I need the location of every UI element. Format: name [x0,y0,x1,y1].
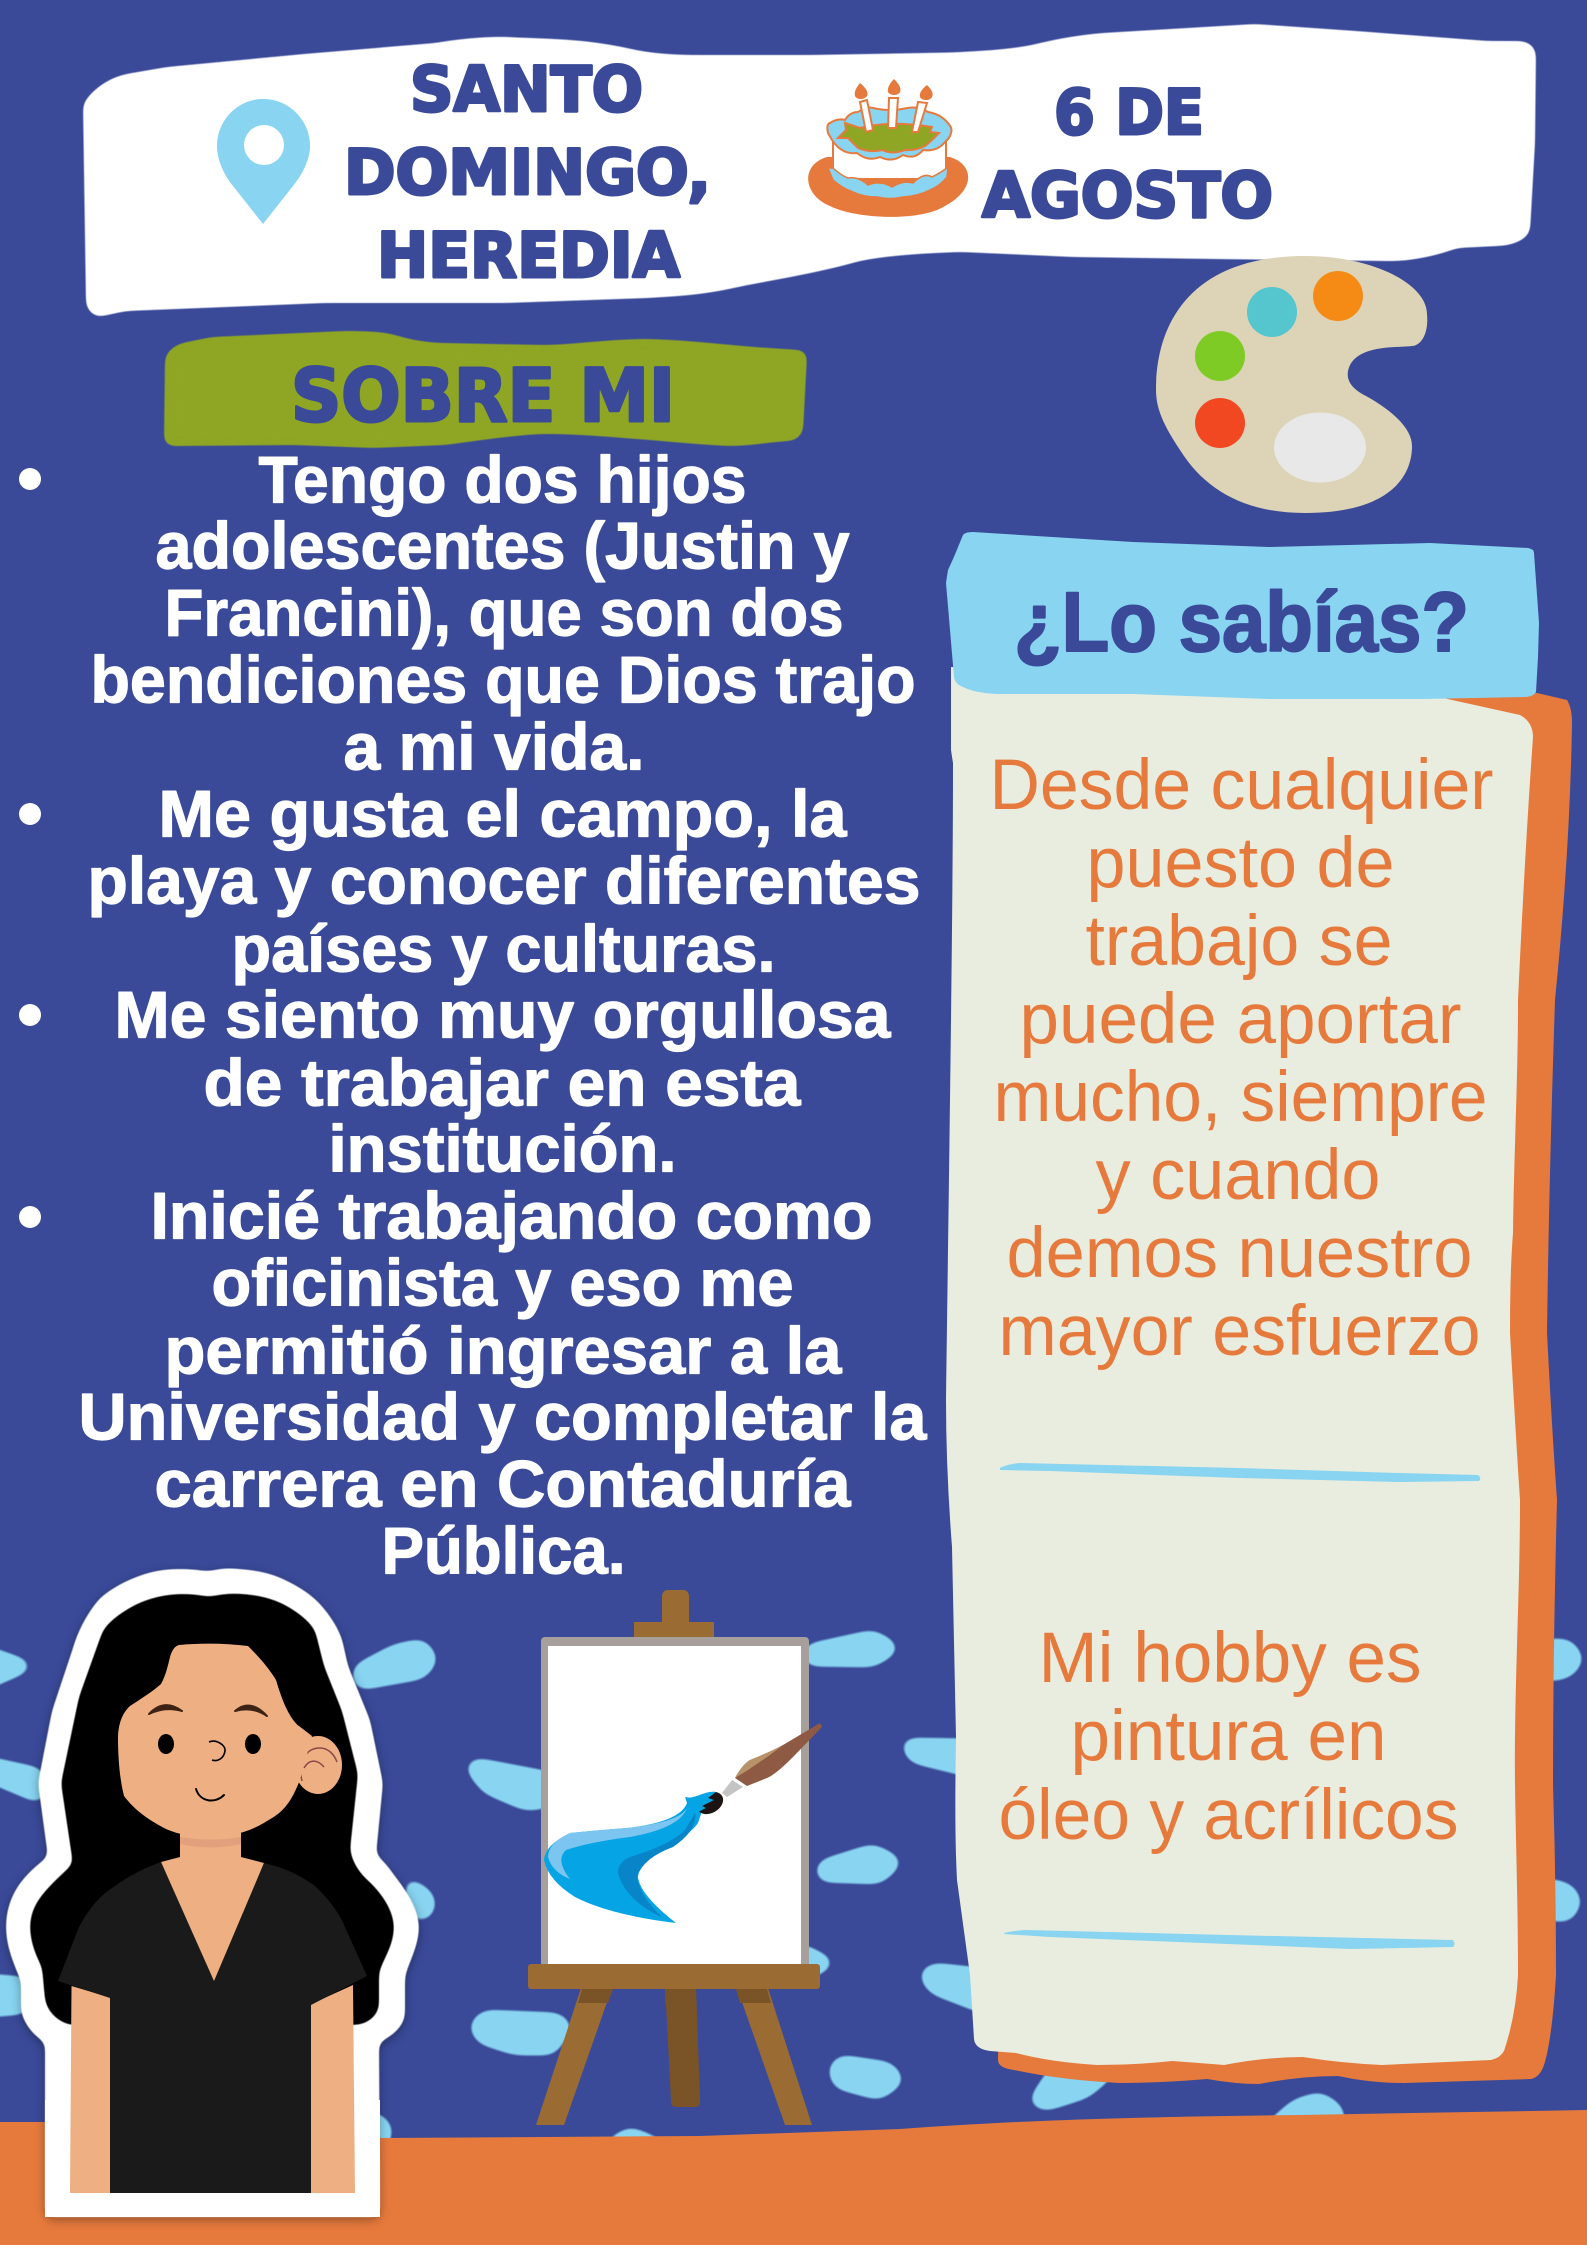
bullet four text [78,1178,928,1588]
location text: HEREDIA [377,219,680,292]
hair [30,1594,394,2025]
bullet dots [19,468,41,1228]
black shirt [58,1862,367,2193]
hobby text: pintura en [1070,1697,1386,1776]
bullet four text: oficinista y eso me [212,1246,794,1320]
easel top post [634,1590,714,1640]
divider stroke one [1000,1463,1480,1482]
easel front legs [536,1985,812,2125]
date text [982,76,1273,232]
header banner [83,24,1536,317]
location text: SANTO [410,53,643,126]
bullet two text: Me gusta el campo, la [158,776,848,850]
hobby text: Mi hobby es [1038,1619,1422,1698]
bullet one text: a mi vida. [344,710,644,784]
face [118,1644,312,1837]
panel orange backing [998,692,1572,2084]
fact text [990,746,1494,1371]
divider stroke two [1004,1930,1454,1949]
bullet four text: carrera en Contaduría [154,1446,852,1520]
portrait sticker [6,1568,419,2217]
bullet three text [114,978,892,1186]
arms [70,1985,355,2193]
bullet two text [88,776,921,986]
fact text: puesto de [1086,824,1394,903]
panel heading: ¿Lo sabías? [1014,575,1469,669]
icon: birthday cake [808,79,968,217]
location text [344,53,711,292]
fact text: puede aportar [1020,980,1462,1059]
icon: paint palette [1156,256,1427,513]
panel cream body [946,667,1533,2065]
canvas white [548,1646,801,1966]
sticker square base [45,2100,380,2217]
easel leg shadows [578,1989,771,2003]
easel shelf [528,1964,820,1989]
bullet one text: adolescentes (Justin y [156,508,850,582]
location text: DOMINGO, [344,136,711,209]
bullet three text: Me siento muy orgullosa [114,978,892,1052]
fact text: trabajo se [1086,902,1392,981]
bullet two text: playa y conocer diferentes [88,844,921,918]
bullet one text: Tengo dos hijos [258,442,746,516]
bullet four text: Inicié trabajando como [150,1178,872,1252]
background droplets [0,1636,1578,2150]
date text: AGOSTO [982,159,1273,232]
sticker white outline [6,1568,419,2217]
chest [161,1857,264,1985]
fact text: y cuando [1096,1136,1380,1215]
easel with canvas [528,1590,822,2125]
heading: sobre mi [164,331,807,448]
heading banner [164,331,807,448]
fact text: demos nuestro [1006,1214,1472,1293]
ear [294,1736,342,1794]
neck shadow [180,1837,241,1848]
paint brush stroke [544,1797,703,1923]
heading text: SOBRE MI [291,354,675,439]
paint brush [686,1723,822,1819]
bullet three text: institución. [328,1112,676,1186]
easel back leg [665,1985,700,2107]
hobby text [998,1619,1458,1855]
panel: lo sabias [946,532,1572,2084]
fact text: mayor esfuerzo [998,1292,1480,1371]
bullet list: about me [19,442,928,1588]
bullet four text: Universidad y completar la [78,1380,928,1454]
neck [180,1825,241,1865]
bullet one text [90,442,916,784]
bullet one text: bendiciones que Dios trajo [90,642,916,716]
bullet three text: de trabajar en esta [204,1046,802,1120]
bullet four text: permitió ingresar a la [164,1314,843,1388]
hobby text: óleo y acrílicos [998,1776,1458,1855]
fact text: Desde cualquier [990,746,1494,825]
fact text: mucho, siempre [994,1058,1488,1137]
bullet two text: países y culturas. [232,912,776,986]
icon: location pin [217,99,310,224]
bullet one text: Francini), que son dos [164,576,844,650]
banner shape [83,24,1536,317]
facial features [149,1705,267,1801]
panel blue header [946,532,1539,699]
bullet four text: Pública. [382,1514,626,1588]
date text: 6 DE [1054,76,1204,149]
canvas frame [541,1637,809,1967]
orange ground band [0,2110,1587,2245]
